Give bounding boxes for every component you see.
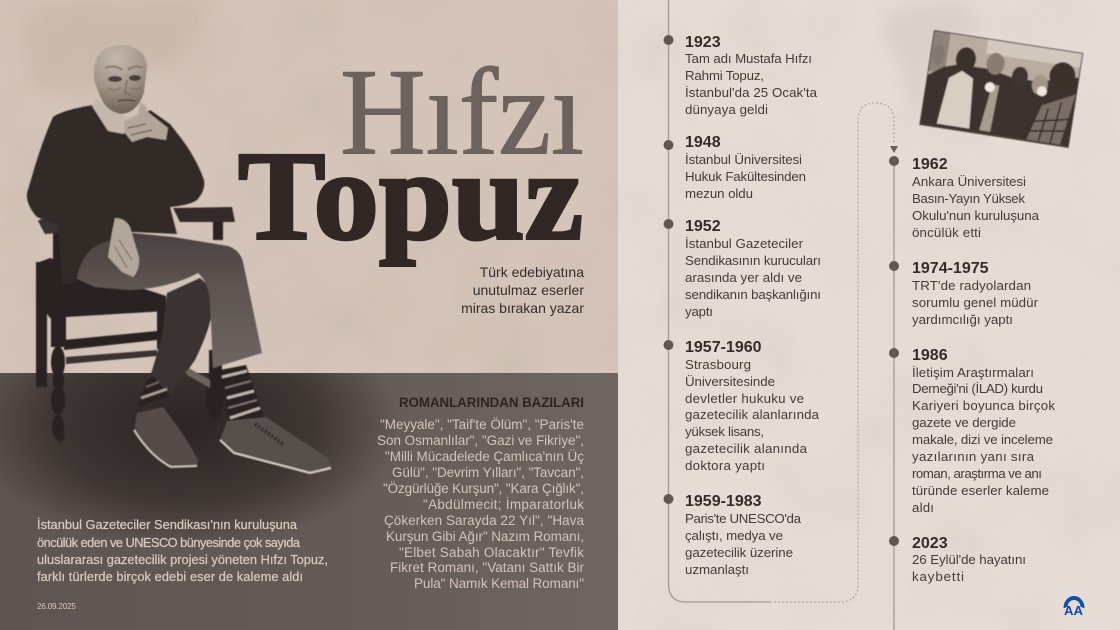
entry: 1957-1960: gazetecilik alanında [685,441,808,456]
chair [36,207,235,441]
portrait: seated man on a wooden chair [27,45,331,473]
entry: 1957-1960: 1957-1960 [685,339,762,356]
collar [92,98,130,134]
entry: 1923: İstanbul'da 25 Ocak'ta [685,85,818,100]
entry: 1948: İstanbul Üniversitesi [685,152,802,167]
left sock [137,376,170,407]
entry: 1974-1975: yardımcılığı yaptı [912,312,1013,327]
timeline markers [664,35,899,546]
entry: 2023: 26 Eylül'de hayatını [912,552,1026,567]
entry: 1986: İletişim Araştırmaları [912,365,1034,380]
entry: 1959-1983: Paris'te UNESCO'da [685,511,802,526]
entry: 1986: Derneği'ni (İLAD) kurdu [912,381,1043,396]
timeline connector line [668,0,894,630]
entry: 1952: İstanbul Gazeteciler [685,236,804,251]
entry: 1948: Hukuk Fakültesinden [685,169,806,184]
text block: summary: öncülük eden ve UNESCO bünyesinde çok sayıda [37,535,301,550]
entry: 1974-1975: sorumlu genel müdür [912,295,1039,310]
entry: 1959-1983: gazetecilik üzerine [685,545,793,560]
logo: AA: AA [1064,603,1084,618]
text block: novels list: Fikret Romanı, "Vatanı Sattık Bir [390,560,584,575]
text block: summary: İstanbul Gazeteciler Sendikası'nın kuruluşuna [37,517,298,532]
entry: 1962: öncülük etti [912,225,981,240]
entry: 1957-1960: gazetecilik alanlarında [685,407,820,422]
entry: 1923: 1923 [685,34,721,51]
entry: 1974-1975: TRT'de radyolardan [912,278,1031,293]
entry: 1957-1960: doktora yaptı [685,458,765,473]
entry: 1957-1960 [685,339,820,473]
text block: summary [37,517,328,584]
entry: 1957-1960: Strasbourg [685,357,751,372]
entry: 1923: Tam adı Mustafa Hıfzı [685,51,812,66]
text block: novels list: Kurşun Gibi Ağır" Nazım Romanı, [386,529,584,544]
entry: 1957-1960: yüksek lisans, [685,424,764,439]
crossed trouser leg [73,233,262,368]
subtitle: Türk edebiyatına [480,264,584,280]
text block: novels list: "Özgürlüğe Kurşun", "Kara Çığlık", [383,481,584,496]
date: 26.09.2025 [37,602,77,611]
logo: AA [1064,597,1084,618]
right sock [220,365,264,430]
left shoe [134,407,198,468]
panel: left lower dark background [0,373,618,630]
right shoe [220,417,331,473]
entry: 1957-1960: Üniversitesinde [685,374,775,389]
entry: 1986: Kariyeri boyunca birçok [912,398,1055,413]
title: Hıfzı: Hıfzı [340,44,584,180]
heading: novels: ROMANLARINDAN BAZILARI [399,394,584,410]
rear lower leg [150,278,213,394]
entry: 1962 [912,156,1040,240]
entry: 1959-1983: uzmanlaştı [685,562,749,577]
arrow head [890,146,898,153]
entry: 2023 [912,535,1026,584]
text block: novels list: Son Osmanlılar", "Gazi ve Fikriye", [377,433,584,448]
entry: 1952 [685,218,821,319]
hand at chin [124,102,168,142]
subtitle: unutulmaz eserler [473,282,584,298]
entry: 1952: Sendikasının kurucuları [685,253,821,268]
text block: novels list: Çökerken Sarayda 22 Yıl", "Hava [384,513,584,528]
entry: 1957-1960: devletler hukuku ve [685,391,804,406]
text block: novels list [377,417,584,591]
entry: 1952: 1952 [685,218,721,235]
entry: 1959-1983: 1959-1983 [685,493,762,510]
text block: summary: farklı türlerde birçok edebi eser de kaleme aldı [37,569,303,584]
entry: 1962: Basın-Yayın Yüksek [912,191,1025,206]
photo: historic group picture [919,30,1083,148]
text block: novels list: Gülü", "Devrim Yılları", "Tavcan", [392,465,584,480]
entry: 1986 [912,347,1055,515]
entry: 2023: kaybetti [912,569,964,584]
panel: right timeline background [618,0,1120,630]
entry: 1948: mezun oldu [685,186,753,201]
hand on knee [108,218,139,277]
text block: novels list: "Abdülmecit; İmparatorluk [423,497,584,512]
entry: 1952: yaptı [685,304,713,319]
entry: 1959-1983: çalıştı, medya ve [685,528,783,543]
text block: summary: uluslararası gazetecilik projesi yöneten Hıfzı Topuz, [37,552,328,567]
entry: 1962: Ankara Üniversitesi [912,174,1026,189]
entry: 1952: arasında yer aldı ve [685,270,802,285]
text block: novels list: "Elbet Sabah Olacaktır" Tevfik [399,545,584,560]
entry: 1986: türünde eserler kaleme [912,483,1049,498]
entry: 1962: 1962 [912,156,948,173]
entry: 1986: aldı [912,500,934,515]
entry: 1923: dünyaya geldi [685,102,768,117]
entry: 1986: makale, dizi ve inceleme [912,432,1053,447]
entry: 1959-1983 [685,493,802,577]
entry: 1948 [685,134,806,201]
entry: 1986: 1986 [912,347,948,364]
text block: novels list: "Meyyale", "Taif'te Ölüm", "Paris'te [380,417,584,432]
entry: 1948: 1948 [685,134,721,151]
entry: 1986: yazılarının yanı sıra [912,449,1035,464]
entry: 2023: 2023 [912,535,948,552]
sweater [27,105,204,285]
subtitle: miras bırakan yazar [461,300,584,316]
entry: 1974-1975: 1974-1975 [912,260,989,277]
panel: left upper background [0,0,618,374]
entry: 1923 [685,34,818,117]
entry: 1974-1975 [912,260,1039,327]
entry: 1923: Rahmi Topuz, [685,68,764,83]
subtitle [461,264,584,316]
text block: novels list: Pula" Namık Kemal Romanı" [414,576,584,591]
head [94,45,147,114]
entry: 1962: Okulu'nun kuruluşuna [912,208,1040,223]
entry: 1986: gazete ve dergide [912,415,1016,430]
title: Topuz: Topuz [238,126,583,266]
entry: 1952: sendikanın başkanlığını [685,287,821,302]
entry: 1986: roman, araştırma ve anı [912,466,1042,481]
text block: novels list: "Milli Mücadelede Çamlıca'nın Üç [385,449,584,464]
